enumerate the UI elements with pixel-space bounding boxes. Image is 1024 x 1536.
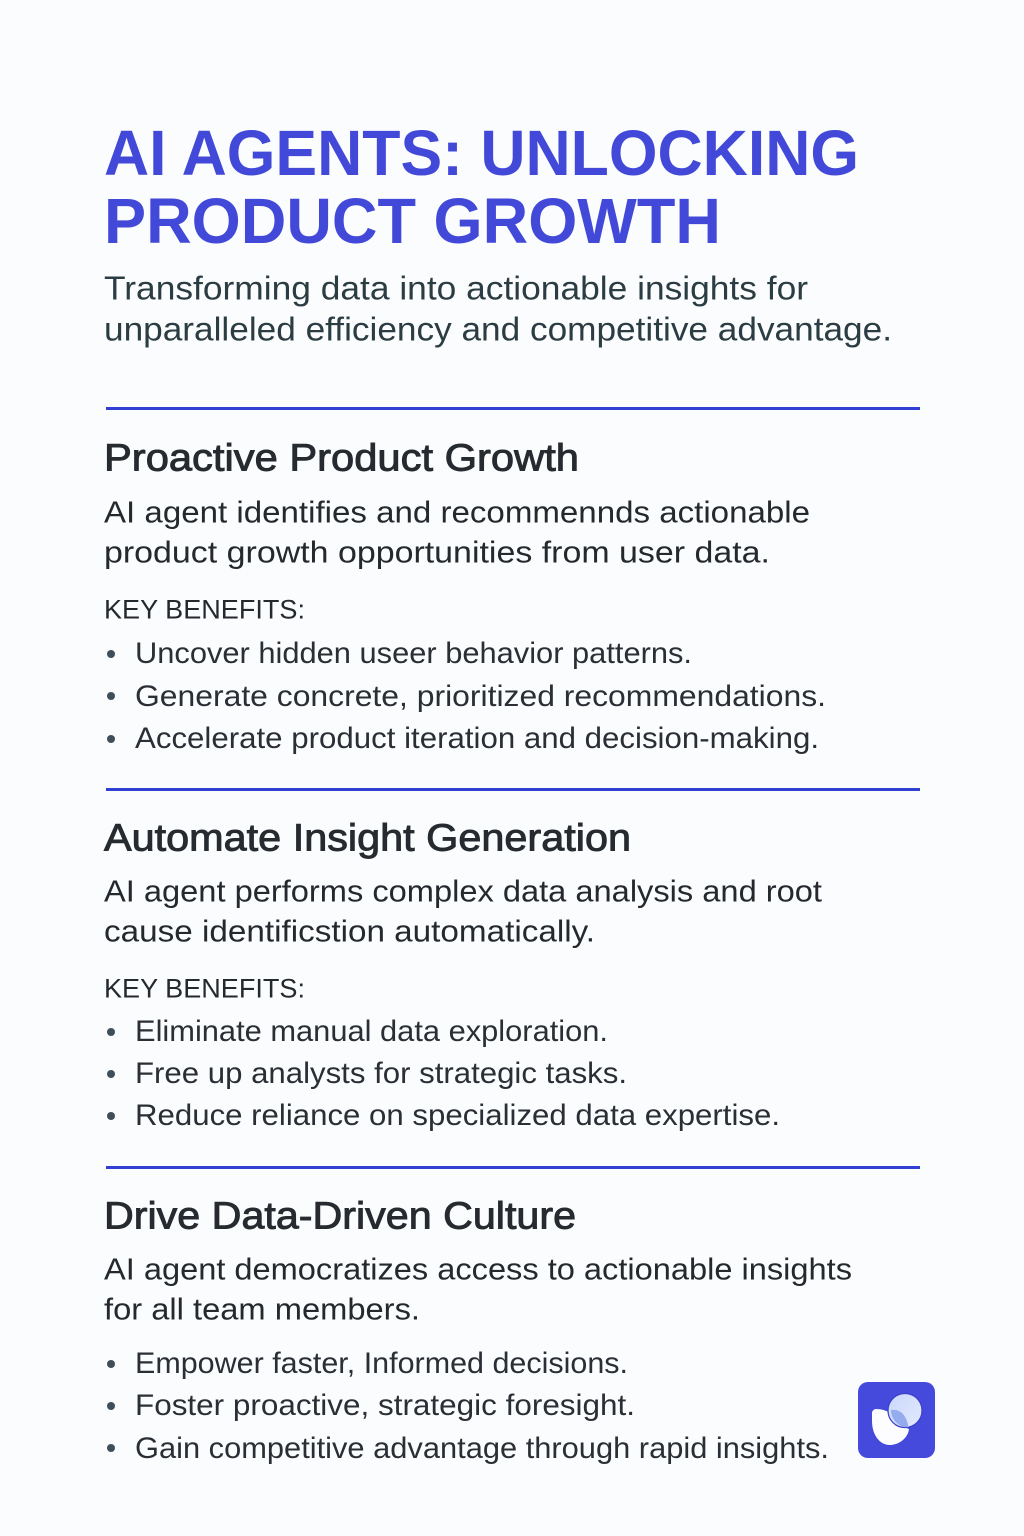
heading: automate insight generation: Automate Insight Generation xyxy=(104,818,631,860)
description: drive data-driven culture xyxy=(104,1251,852,1326)
panel: drive data-driven culture xyxy=(104,1196,852,1465)
benefits list xyxy=(107,1015,780,1132)
title: AI AGENTS: UNLOCKING xyxy=(104,117,859,189)
key benefits label: KEY BENEFITS: xyxy=(104,973,305,1003)
benefits list: Empower faster, Informed decisions. xyxy=(135,1347,628,1380)
benefits list: Foster proactive, strategic foresight. xyxy=(135,1389,635,1422)
description: automate insight generation: AI agent performs complex data analysis and root xyxy=(104,873,822,908)
subtitle: unparalleled efficiency and competitive advantage. xyxy=(104,310,892,347)
subtitle xyxy=(104,270,892,347)
benefits list: Free up analysts for strategic tasks. xyxy=(135,1057,627,1090)
description: drive data-driven culture: for all team members. xyxy=(104,1291,420,1326)
heading: proactive product growth: Proactive Product Growth xyxy=(104,438,579,480)
benefits list: Accelerate product iteration and decision-making. xyxy=(135,722,819,755)
title xyxy=(104,117,859,257)
benefits list: Eliminate manual data exploration. xyxy=(135,1015,608,1048)
panel: automate insight generation xyxy=(104,818,822,1132)
key benefits label: KEY BENEFITS: xyxy=(104,594,305,624)
benefits list: Gain competitive advantage through rapid insights. xyxy=(135,1432,829,1465)
description: proactive product growth xyxy=(104,494,810,569)
subtitle: Transforming data into actionable insights for xyxy=(104,270,808,307)
benefits list: Reduce reliance on specialized data expertise. xyxy=(135,1099,780,1132)
description: proactive product growth: product growth opportunities from user data. xyxy=(104,534,770,569)
icon: logo badge xyxy=(858,1382,935,1458)
description: automate insight generation: cause identificstion automatically. xyxy=(104,913,595,948)
description: proactive product growth: AI agent identifies and recommennds actionable xyxy=(104,494,810,529)
benefits list: Uncover hidden useer behavior patterns. xyxy=(135,637,692,670)
title: PRODUCT GROWTH xyxy=(104,185,721,257)
benefits list: Generate concrete, prioritized recommendations. xyxy=(135,680,826,713)
benefits list xyxy=(107,1347,829,1465)
description: automate insight generation xyxy=(104,873,822,948)
heading: drive data-driven culture: Drive Data-Driven Culture xyxy=(104,1196,576,1238)
panel: proactive product growth xyxy=(104,438,826,755)
description: drive data-driven culture: AI agent democratizes access to actionable insights xyxy=(104,1251,852,1286)
benefits list xyxy=(107,637,826,755)
